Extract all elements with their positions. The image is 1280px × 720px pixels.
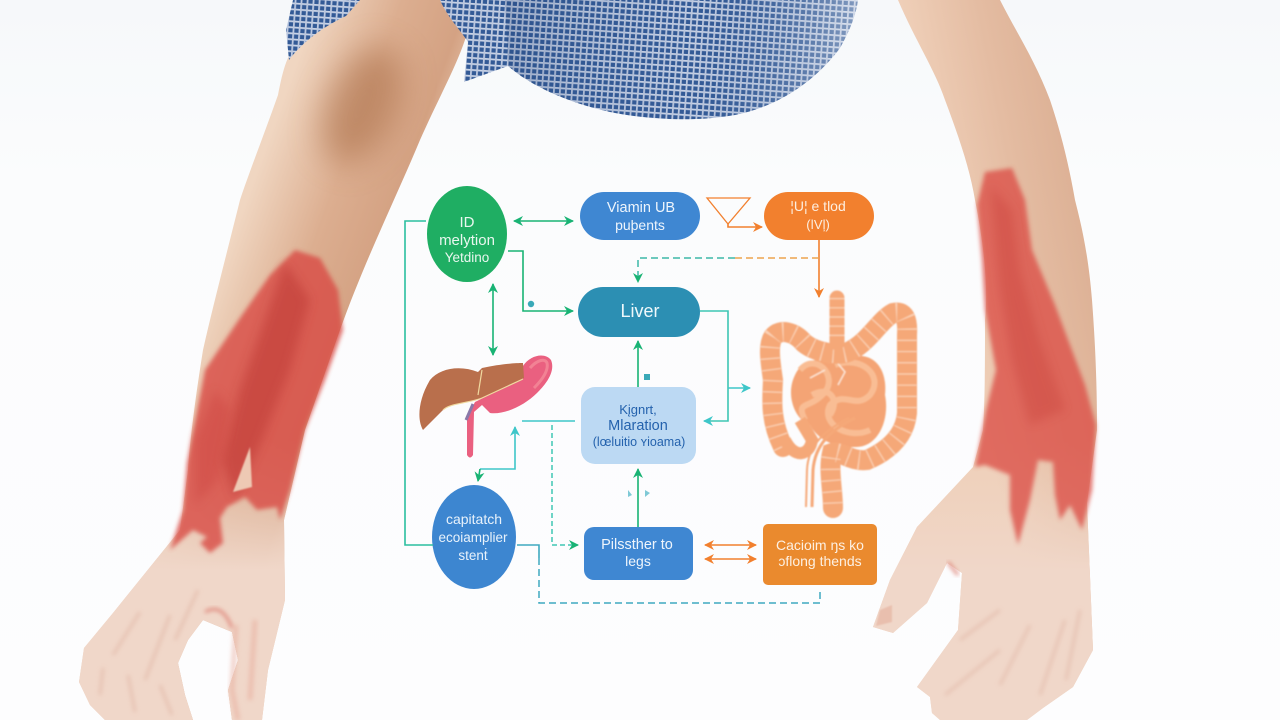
arrow: branch to intestines (728, 387, 750, 389)
node: Kidney box (581, 387, 696, 464)
shirt: body and right sleeve (440, 0, 858, 119)
arrow: dashed to Liver (638, 258, 819, 282)
icon: small marker (644, 374, 650, 380)
arrow: oval to Vitamin UB (514, 220, 573, 222)
arrow: Kidney to Liver (637, 341, 639, 387)
arrow: Pfister to Calcium double (705, 545, 756, 559)
shirt: left sleeve (286, 0, 360, 60)
arrow: down to blue oval (478, 469, 480, 481)
arrow: Kidney side line (522, 420, 575, 422)
illustration: intestines (770, 298, 907, 508)
rash: left forearm (170, 250, 343, 553)
arrow: dashed to Pfister (552, 425, 578, 545)
rash: right forearm (975, 168, 1096, 545)
node: blue oval: capitatch (446, 511, 502, 527)
node: ID melytion oval (427, 186, 507, 282)
node: Vitamin UB pill: puþents (615, 217, 665, 233)
arrow: up to liver organ (480, 427, 515, 469)
node: Liver pill: Liver (620, 301, 660, 321)
arrow: left feedback line (405, 221, 433, 545)
node: ID melytion oval: Yetdino (445, 250, 489, 265)
node: blue oval (432, 485, 516, 589)
node: Kidney box: Kįgnrt, (619, 402, 657, 417)
node: Vitamin UB pill (580, 192, 700, 240)
node: Kidney box: Mlaration (608, 418, 668, 434)
node: Calcium box (763, 524, 877, 585)
icon: small drop (528, 301, 534, 307)
node: Calcium box: Cacioim ŋs ko (776, 537, 864, 553)
node: Liver pill (578, 287, 700, 337)
node: blue oval: stenṫ (458, 548, 488, 563)
node: Calcium box: ɔflong thends (778, 553, 862, 569)
node: ID melytion oval: ID (460, 214, 475, 231)
node: orange pill (764, 192, 874, 240)
node: Pfister box: Pilssther to (601, 537, 673, 553)
node: ID melytion oval: melytion (439, 232, 495, 249)
node: Vitamin UB pill: Viamin UB (607, 200, 675, 216)
arrow: blue oval to Calcium (517, 545, 820, 603)
right arm and hand (873, 0, 1097, 720)
node: Kidney box: (lœluitio ʏioama) (593, 435, 685, 449)
arrow: funnel outline (707, 198, 750, 224)
arrow: Pfister to Kidney (637, 469, 639, 527)
left arm and hand (79, 0, 468, 720)
shirt (286, 0, 858, 119)
arrow: oval to Liver (508, 251, 573, 311)
arrow: orange pill to intestines (818, 240, 820, 297)
arrow: oval to liver organ (492, 284, 494, 355)
arrow: funnel to orange pill (728, 224, 762, 227)
icon: small marks (628, 490, 650, 497)
node: orange pill: ¦U¦ e tlod (790, 198, 846, 214)
node: orange pill: (ǀVļ) (806, 217, 830, 232)
node: Pfister box: legs (625, 553, 651, 569)
node: Pfister box (584, 527, 693, 580)
arrow: Liver to Kidney (700, 311, 728, 421)
node: blue oval: ecoiamplier (438, 530, 508, 545)
illustration: liver and pancreas (419, 355, 552, 458)
